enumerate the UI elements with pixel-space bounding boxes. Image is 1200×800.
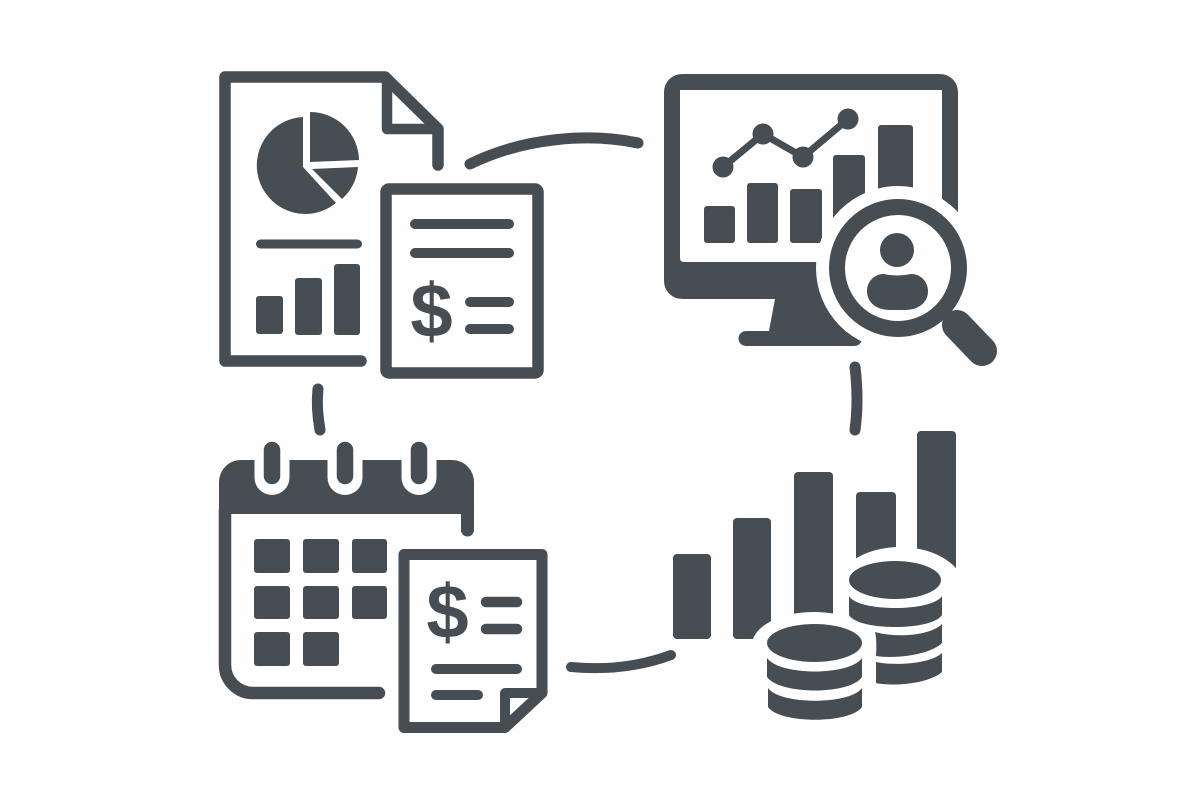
- monitor body: [664, 74, 958, 346]
- icon: calendar with invoice: [219, 445, 542, 728]
- invoice sheet: $: [410, 269, 453, 354]
- screen bar chart: [704, 125, 913, 260]
- arrow: connector right: [855, 367, 857, 430]
- front coin halo: [752, 612, 876, 678]
- magnifier handle: [957, 325, 982, 351]
- small bar chart: [256, 264, 360, 335]
- invoice sheet: [386, 189, 538, 373]
- rising bars: [673, 431, 956, 639]
- magnifier halo cut-out: [816, 186, 980, 350]
- bill sheet: [404, 554, 542, 728]
- person icon: [867, 233, 928, 310]
- report divider line: [260, 240, 358, 248]
- report page outline: [225, 77, 438, 361]
- arrow: connector bottom: [571, 655, 671, 668]
- calendar rings: [272, 445, 419, 478]
- back coin stack: [849, 561, 942, 685]
- icon: report document with pie chart and invoice: [225, 77, 538, 373]
- icon: rising bars with coin stacks: [673, 431, 965, 720]
- screen line chart: [712, 108, 858, 178]
- calendar day grid: [254, 539, 387, 666]
- front coin stack: [767, 624, 862, 720]
- bill sheet: $: [426, 570, 469, 655]
- calendar frame: [219, 460, 474, 693]
- arrow: connector left: [317, 389, 320, 430]
- pie chart: [257, 112, 359, 214]
- arrow: connector top: [470, 138, 638, 164]
- magnifier lens ring: [837, 207, 959, 329]
- icon: monitor with analytics and magnifier: [664, 74, 982, 351]
- monitor screen: [680, 90, 942, 262]
- back coin halo: [835, 547, 965, 633]
